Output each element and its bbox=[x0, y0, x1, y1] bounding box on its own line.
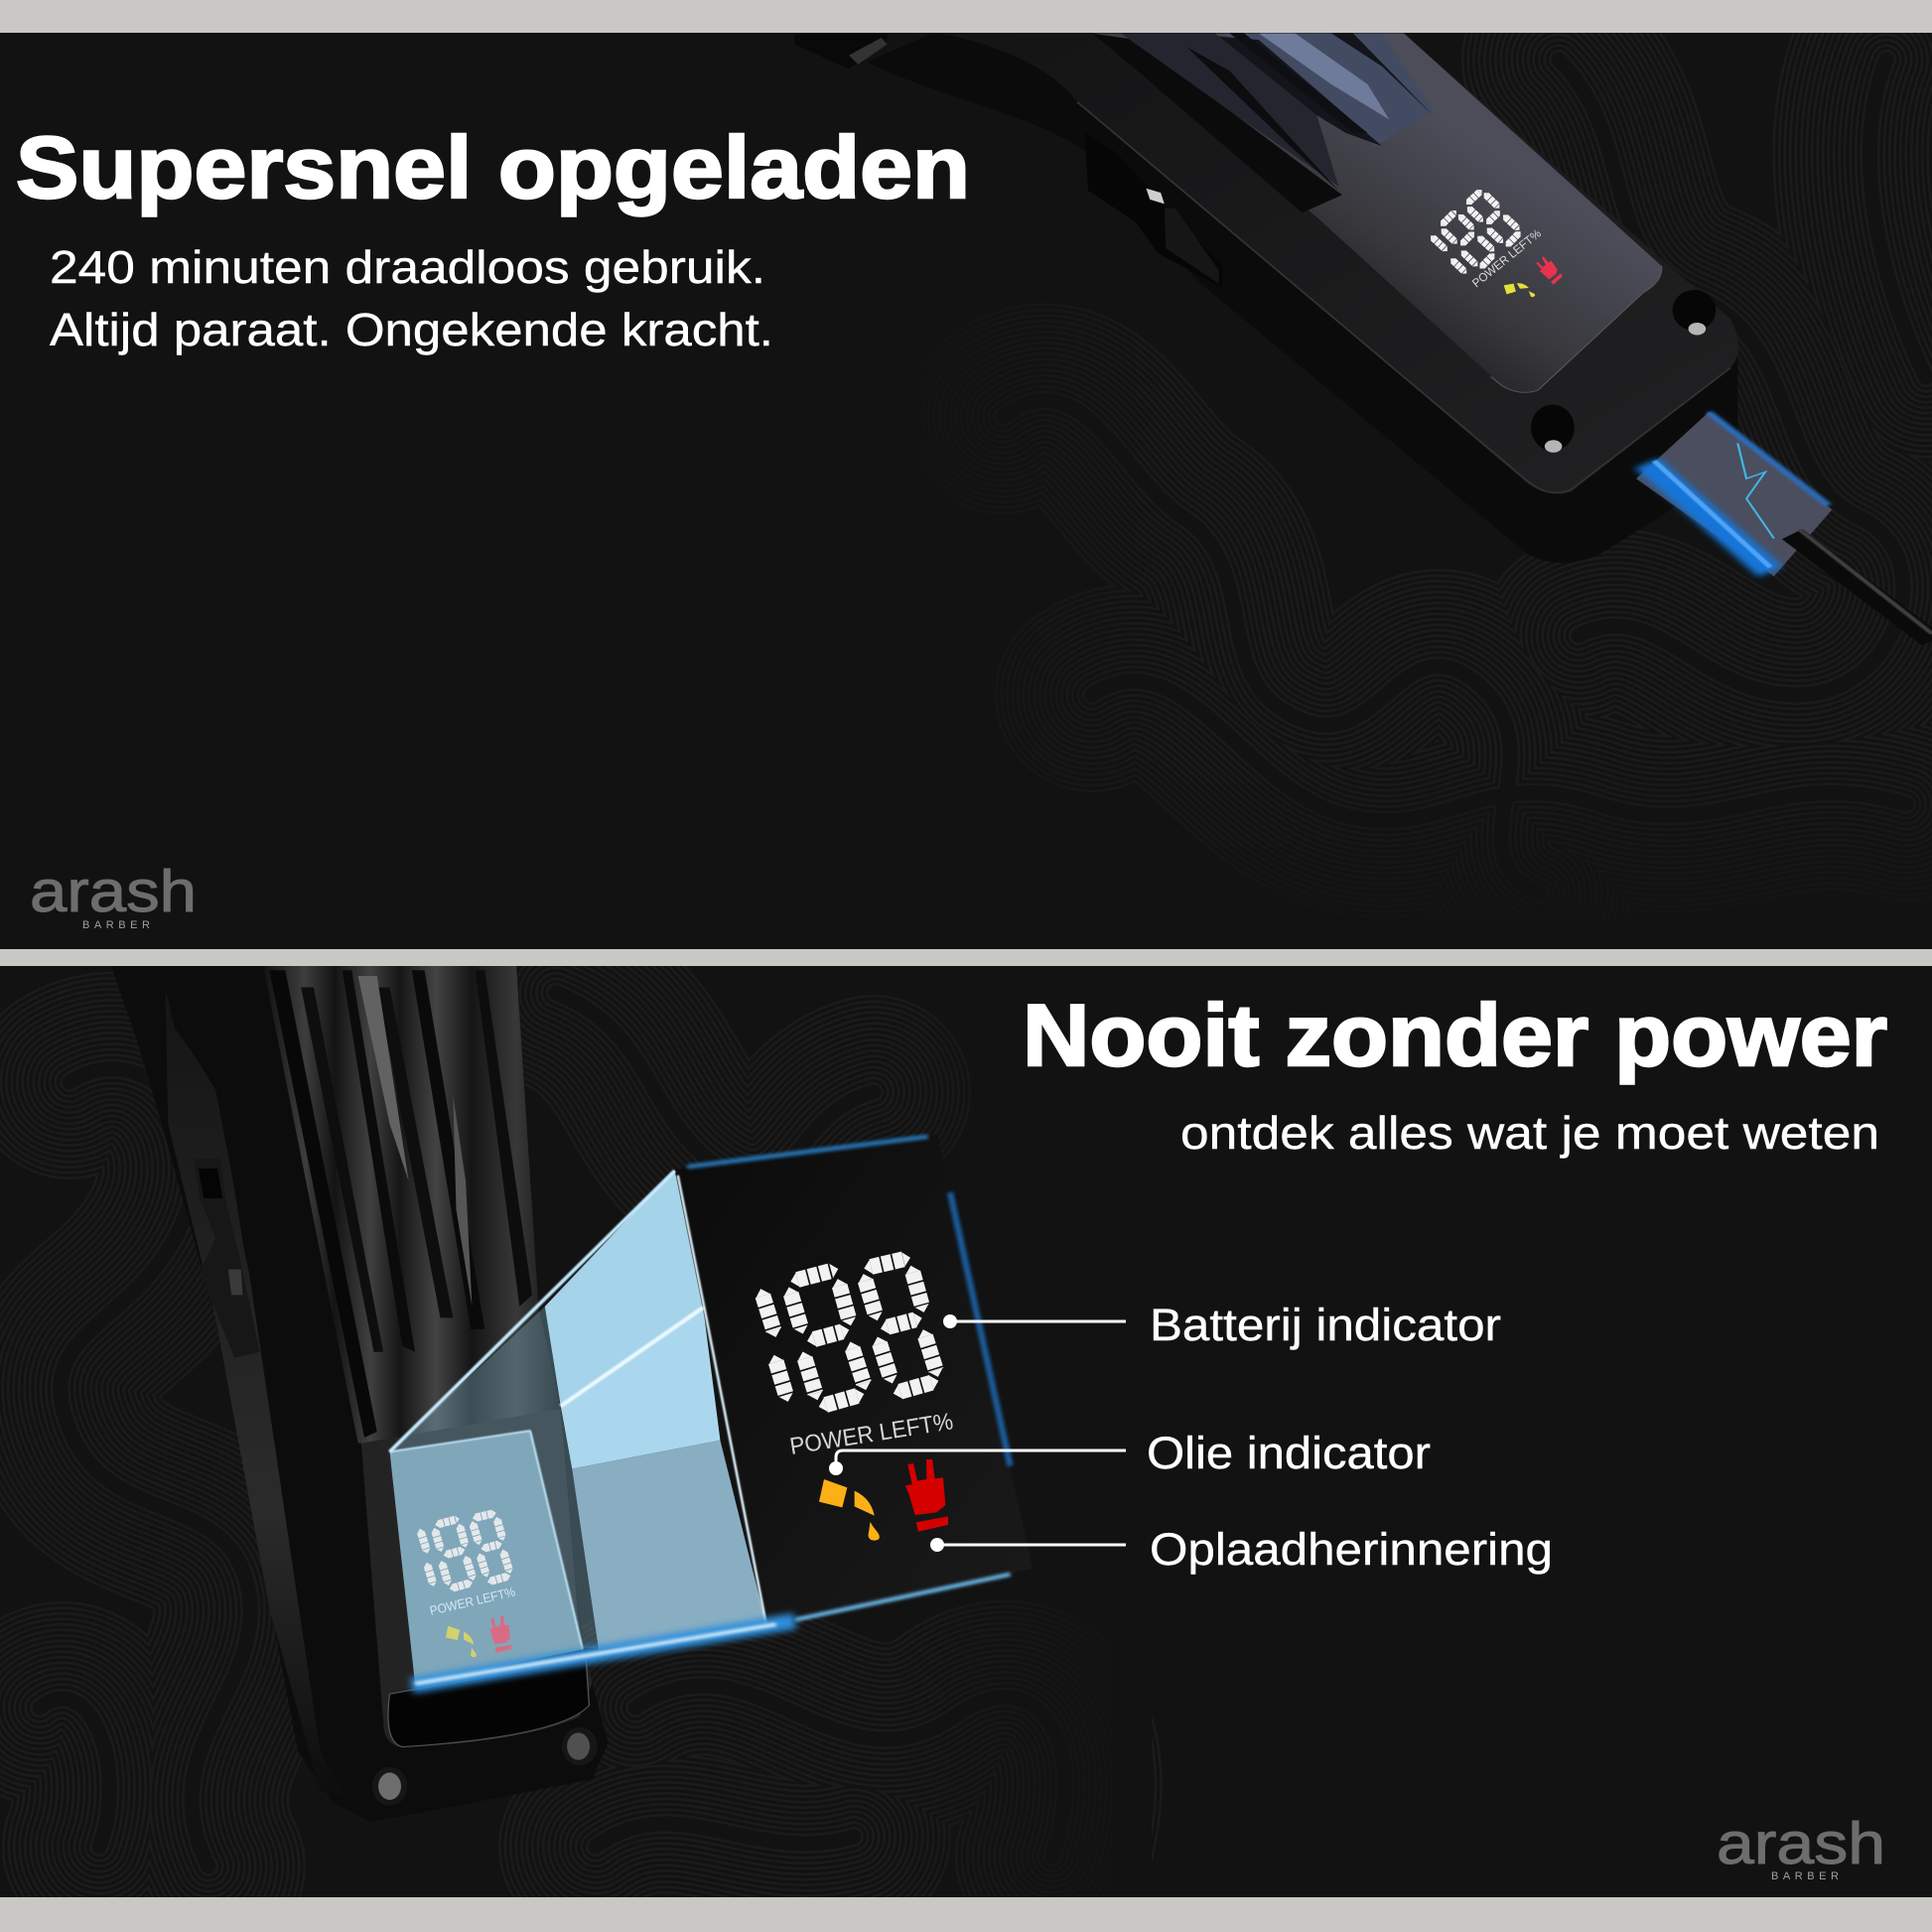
icon: plug bbox=[1536, 256, 1563, 285]
clipper with zoomed display bbox=[111, 966, 1033, 1822]
top gray band bbox=[0, 0, 1932, 34]
background wave pattern bbox=[1158, 33, 1932, 774]
subheading line 1: 240 minuten draadloos gebruik. bbox=[50, 241, 765, 293]
big lcd display bbox=[762, 1259, 955, 1541]
pattern fade right bbox=[1124, 1661, 1152, 1897]
lcd display on clipper bbox=[1430, 189, 1563, 298]
clipper ribs bbox=[263, 966, 561, 1444]
icon: oil bbox=[1503, 283, 1535, 298]
side switch bbox=[1086, 153, 1187, 269]
label: olie indicator: Olie indicator bbox=[1147, 1428, 1431, 1478]
panel background bbox=[0, 966, 1932, 1897]
subheading line 2: Altijd paraat. Ongekende kracht. bbox=[50, 304, 773, 355]
big power left label: POWER LEFT% bbox=[788, 1408, 955, 1460]
callout: batterij bbox=[943, 1314, 1126, 1328]
power left label: POWER LEFT% bbox=[1469, 226, 1544, 290]
clipper body bbox=[111, 966, 609, 1822]
heading: Supersnel opgeladen bbox=[16, 118, 970, 216]
pattern fade bbox=[905, 404, 907, 431]
icon: small oil bbox=[446, 1626, 477, 1657]
side highlight bbox=[166, 991, 316, 1727]
clipper face plate bbox=[1092, 33, 1662, 392]
callout: olie bbox=[829, 1450, 1126, 1475]
clipper back body bbox=[1247, 246, 1737, 563]
glow edges bbox=[687, 1137, 928, 1167]
label: batterij indicator: Batterij indicator bbox=[1150, 1300, 1501, 1350]
pattern fade bottom bbox=[1433, 928, 1628, 949]
logo: arash barber: BARBER bbox=[1771, 1870, 1839, 1882]
small power left label: POWER LEFT% bbox=[428, 1584, 517, 1618]
heading: Nooit zonder power bbox=[1023, 986, 1887, 1084]
panel: nooit zonder power bbox=[0, 966, 1932, 1897]
beam upper panel bbox=[545, 1170, 703, 1406]
big screen bbox=[675, 1135, 1033, 1625]
clipper head tip bbox=[794, 33, 889, 69]
callout: oplaad bbox=[930, 1538, 1126, 1552]
switch bbox=[203, 1209, 260, 1358]
panel background bbox=[0, 33, 1932, 949]
middle gray band bbox=[0, 949, 1932, 966]
background wave pattern bbox=[40, 993, 1065, 1866]
beam lower panel bbox=[572, 1441, 766, 1649]
logo: arash barber: BARBER bbox=[82, 919, 150, 931]
clipper rim bbox=[939, 33, 1738, 494]
screws bbox=[372, 1767, 407, 1806]
panel: supersnel opgeladen bbox=[0, 33, 1932, 949]
clipper ribs bbox=[1222, 33, 1433, 146]
lightning bolt bbox=[1737, 443, 1774, 538]
icon: plug bbox=[905, 1459, 948, 1532]
logo: arash barber: arash bbox=[1717, 1811, 1885, 1876]
icon: oil bbox=[819, 1479, 880, 1541]
screws bbox=[1673, 290, 1716, 331]
small screen bbox=[390, 1431, 583, 1684]
charging cable bbox=[1792, 534, 1932, 640]
translucent beam over clipper bbox=[390, 1307, 599, 1648]
charging plug bbox=[1636, 412, 1832, 576]
digits bbox=[762, 1259, 936, 1405]
beam middle panel bbox=[561, 1308, 720, 1468]
logo: arash barber: arash bbox=[30, 859, 197, 924]
bottom gray band bbox=[0, 1897, 1932, 1932]
clipper with usb charger bbox=[794, 33, 1932, 640]
lower clipper face bbox=[361, 1409, 593, 1747]
subheading: ontdek alles wat je moet weten bbox=[1180, 1107, 1879, 1159]
icon: small plug bbox=[489, 1615, 511, 1653]
small lcd display bbox=[421, 1514, 517, 1657]
label: oplaadherinnering: Oplaadherinnering bbox=[1150, 1524, 1553, 1575]
